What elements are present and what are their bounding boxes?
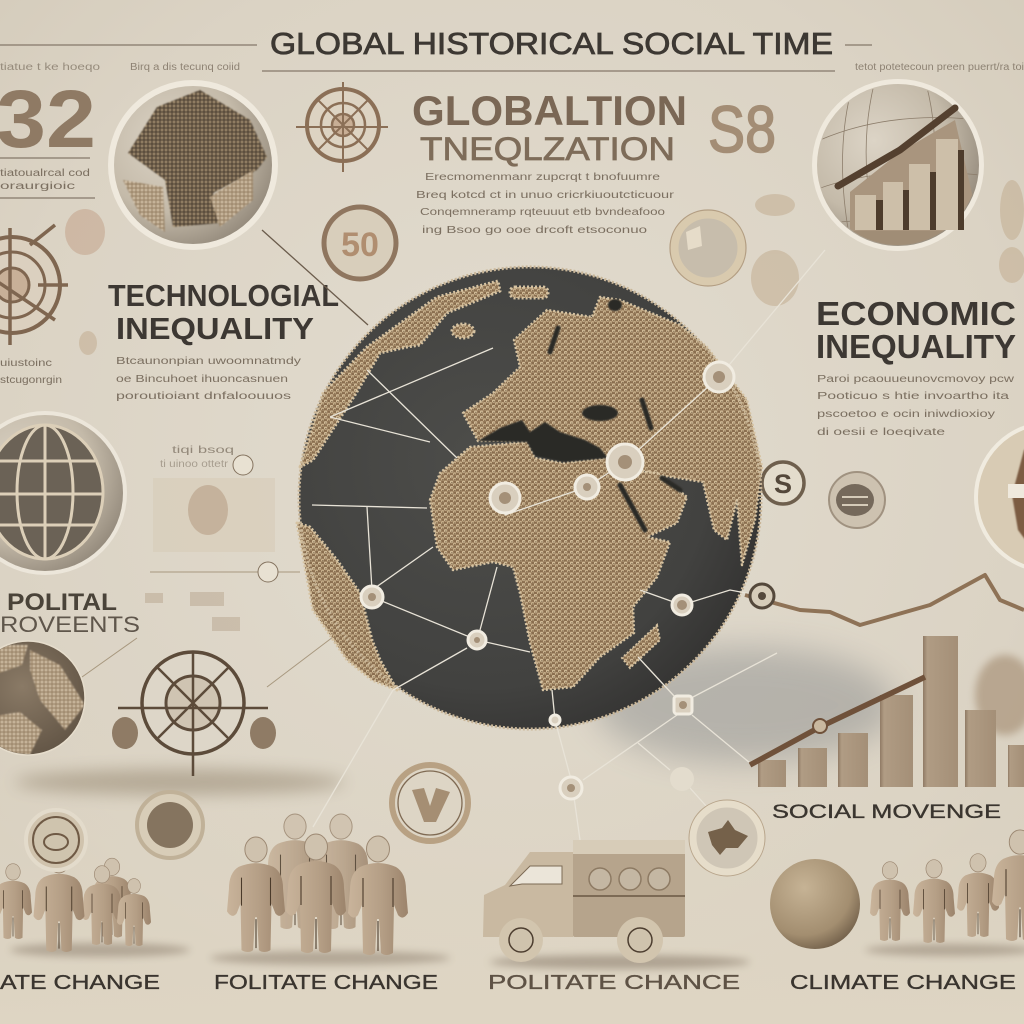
- label: bottom captions: FOLITATE CHANGE: [214, 972, 438, 994]
- continent: americas: [297, 281, 548, 690]
- icon: coin 50: 50: [341, 226, 379, 264]
- text block: left caption: [0, 358, 62, 386]
- text block: technological inequality: oe Bincuhoet ihuoncasnuen: [116, 374, 288, 385]
- text block: economic inequality: Paroi pcaouueunovcmovoy pcw: [817, 374, 1015, 385]
- panel: top left statistic: oraurgioic: [0, 181, 75, 192]
- connection nodes: [361, 362, 734, 799]
- icon: small decorative medallions right: [65, 180, 1024, 355]
- text block: left caption: uiustoinc: [0, 358, 52, 369]
- label: social movement: SOCIAL MOVENGE: [772, 802, 1001, 823]
- panel: top left statistic: [0, 62, 240, 192]
- text block: left caption: stcugonrgin: [0, 375, 62, 386]
- icon: dotted globe sphere top left: [108, 80, 278, 250]
- label: bottom captions: ATE CHANGE: [0, 972, 160, 994]
- text block: technological inequality: poroutioiant dnfaloouuos: [116, 391, 291, 402]
- text block: economic inequality: Pooticuo s htie invoartho ita: [817, 391, 1010, 402]
- heading: globalization: [412, 87, 687, 167]
- heading: political movements: [0, 589, 140, 637]
- heading: political movements: POLITAL: [7, 589, 117, 616]
- icon: emblem coin: [829, 472, 885, 528]
- continent: africa and arabia: [430, 442, 687, 690]
- label: bottom captions: POLITATE CHANCE: [488, 972, 740, 994]
- icon: target left: [0, 225, 68, 345]
- heading: technological inequality: INEQUALITY: [116, 311, 314, 346]
- coin: right: [689, 800, 765, 876]
- title: GLOBAL HISTORICAL SOCIAL TIME: [270, 26, 833, 61]
- globe sphere: [299, 267, 761, 729]
- text block: economic inequality: pscoetoo e ocin iniwdioxioy: [817, 409, 995, 420]
- panel: top left statistic: tiatoualrcal cod: [0, 168, 90, 179]
- panel: faded small icons: tiqi bsoq: [172, 445, 234, 456]
- label: bottom captions: [0, 972, 1016, 994]
- text block: economic inequality: di oesii e loeqivate: [817, 427, 946, 438]
- text block: globalization: Erecmomenmanr zupcrqt t bnofuumre: [425, 172, 661, 183]
- coin: centre: [392, 765, 468, 841]
- panel: faded small icons: [153, 445, 278, 582]
- heading: technological inequality: TECHNOLOGIAL: [108, 278, 339, 313]
- icon: target top: [296, 82, 388, 172]
- connection lines on globe: [312, 250, 825, 840]
- inland seas: [478, 299, 680, 530]
- shadow: globe: [595, 647, 895, 763]
- icon: target with medallions: [112, 652, 276, 776]
- text block: globalization: Conqemneramp rqteuuut etb bvndeafooo: [420, 207, 666, 218]
- continent: eurasia: [463, 297, 762, 565]
- panel: bottom-left globe: [0, 641, 85, 765]
- panel: top left statistic: Birq a dis tecunq coiid: [130, 62, 240, 73]
- heading: political movements: ROVEENTS: [0, 612, 140, 637]
- group: family left: [0, 810, 190, 957]
- text: small top right caption: tetot potetecoun preen puerrt/ra toi: [855, 62, 1024, 73]
- group: people centre: [210, 814, 450, 965]
- icon: delivery truck: [483, 840, 750, 969]
- continent: madagascar: [622, 625, 660, 668]
- chart: bar chart: [750, 636, 1024, 787]
- panel: right edge sphere: [974, 421, 1024, 573]
- label: bottom captions: CLIMATE CHANGE: [790, 972, 1016, 994]
- faded smudges: [145, 592, 240, 631]
- panel: faded small icons: ti uinoo ottetr: [160, 459, 229, 470]
- globe rim: [299, 267, 761, 729]
- icon: textured ball: [770, 859, 860, 949]
- heading: economic inequality: [816, 295, 1016, 365]
- heading: globalization: TNEQLZATION: [420, 131, 675, 167]
- heading: economic inequality: ECONOMIC: [816, 295, 1016, 332]
- icon: bar chart sphere: [812, 79, 985, 251]
- text block: globalization: Breq kotcd ct in unuo cricrkiuoutcticuour: [416, 190, 675, 201]
- icon: dollar coin: S: [774, 469, 792, 499]
- text block: technological inequality: [116, 356, 301, 402]
- panel: mid-left sphere: [0, 411, 127, 575]
- chart: globe: [262, 230, 825, 840]
- panel: top left statistic: tiatue t ke hoeqo: [0, 62, 101, 73]
- statistic: S8: S8: [708, 92, 776, 166]
- heading: globalization: GLOBALTION: [412, 87, 687, 134]
- icon: dollar coin: [762, 462, 804, 504]
- text block: globalization: ing Bsoo go ooe drcoft etsoconuo: [422, 225, 648, 236]
- text block: economic inequality: [817, 374, 1015, 438]
- text block: globalization: [416, 172, 675, 236]
- shadow: ground left: [15, 769, 345, 795]
- icon: ring coin: [670, 210, 746, 286]
- text block: technological inequality: Btcaunonpian uwoomnatmdy: [116, 356, 301, 367]
- chart: trend line: [745, 575, 1024, 625]
- heading: technological inequality: [108, 278, 339, 346]
- heading: economic inequality: INEQUALITY: [816, 328, 1016, 365]
- group: people right: [865, 830, 1024, 956]
- icon: coin 50: [324, 207, 396, 279]
- coin: left: [137, 792, 203, 858]
